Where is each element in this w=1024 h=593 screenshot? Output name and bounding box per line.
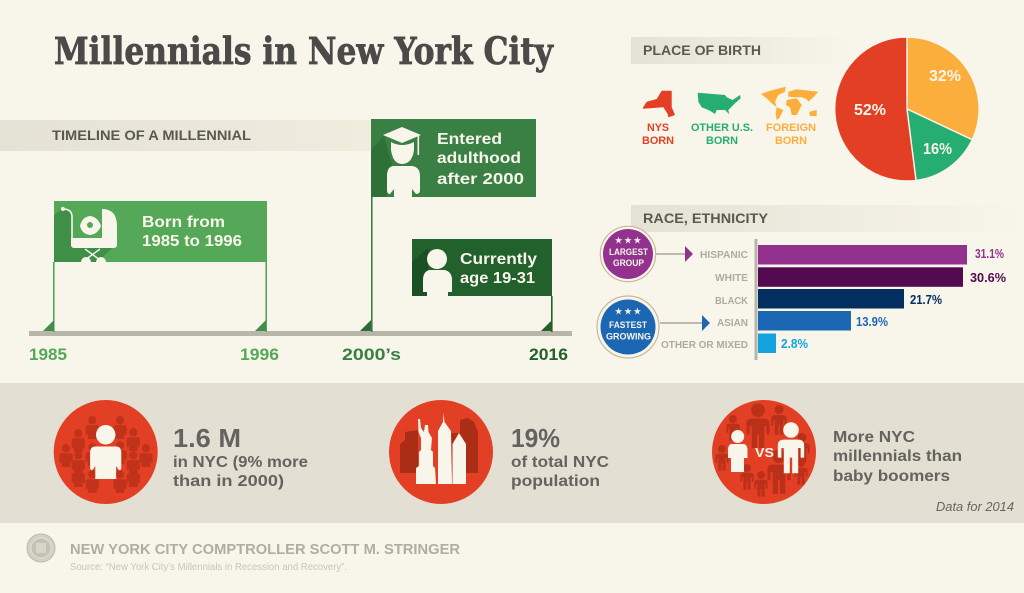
stat: 1.6 million: than in 2000) (173, 473, 284, 490)
timeline axis (29, 331, 572, 336)
icon: millennials vs boomers (712, 400, 816, 504)
panel: race, ethnicity (597, 205, 1024, 360)
icon: graduate (383, 127, 421, 197)
stat: more millennials than boomers: millennials than (833, 448, 962, 465)
pie chart: place of birth: 32% (929, 68, 961, 85)
heading band: race (631, 205, 1024, 232)
stat: 1.6 million (54, 400, 308, 504)
callout: largest group (600, 226, 693, 282)
legend: foreign born: FOREIGN (766, 122, 816, 134)
heading band: place of birth (631, 37, 856, 64)
legend: foreign born (766, 122, 816, 147)
icon: USA map (698, 93, 741, 114)
legend: NYS born (642, 122, 674, 147)
bar chart: ASIAN (717, 318, 748, 329)
heading band: timeline (0, 120, 372, 151)
callout: fastest growing: GROWING (606, 332, 651, 342)
heading band: race: RACE, ETHNICITY (643, 211, 768, 226)
panel: timeline of a millennial (0, 119, 572, 364)
pie chart: place of birth: 52% (854, 102, 886, 119)
text: 1.6 M: 1.6 M (173, 423, 241, 453)
callout: fastest growing: ★ ★ ★ (615, 307, 642, 316)
flag: entered adulthood after 2000 (360, 119, 536, 332)
bar chart: 21.7% (910, 293, 942, 307)
panel: place of birth (631, 37, 979, 181)
flag: entered adulthood after 2000: after 2000 (437, 171, 524, 188)
pie chart: place of birth (835, 37, 979, 181)
heading band: place of birth: PLACE OF BIRTH (643, 43, 761, 58)
bar chart: 13.9% (856, 315, 888, 329)
label: born from: Born from (142, 214, 225, 231)
stat: 19% (389, 400, 609, 504)
bar chart: OTHER OR MIXED (661, 340, 748, 351)
callout: fastest growing: FASTEST (609, 320, 647, 331)
title: Millennials in New York City (54, 29, 555, 73)
bar chart: HISPANIC (700, 250, 748, 261)
text: 19%: 19% (511, 423, 560, 453)
bar chart: 2.8% (781, 337, 808, 351)
icon: city seal (27, 534, 55, 562)
footer credit: NEW YORK CITY COMPTROLLER SCOTT M. STRINGER (70, 542, 461, 558)
icon: baby stroller (61, 207, 117, 262)
icon: New York State map (643, 91, 677, 117)
panel: key stats band (0, 383, 1024, 523)
callout: fastest growing (597, 296, 710, 358)
flag: currently age 19-31 (412, 239, 553, 332)
pie chart: place of birth: 16% (923, 141, 952, 158)
label: entered adulthood: Entered (437, 131, 502, 148)
stat: 19%: population (511, 473, 600, 490)
bar chart: 30.6% (970, 271, 1006, 285)
flag: currently age 19-31: age 19-31 (460, 270, 535, 287)
icon: person (423, 249, 452, 296)
label: currently age: Currently (460, 251, 537, 268)
flag: born from 1985 to 1996 (43, 201, 267, 332)
legend: NYS born: BORN (642, 135, 674, 147)
legend: foreign born: BORN (775, 135, 807, 147)
bar chart: 31.1% (975, 247, 1004, 261)
bar chart: WHITE (715, 273, 748, 284)
callout: largest group: ★ ★ ★ (615, 236, 642, 245)
bar chart (661, 239, 1006, 360)
flag: entered adulthood after 2000: adulthood (437, 150, 521, 167)
year labels: 1996 (240, 345, 279, 364)
legend: other U.S. born (691, 122, 753, 147)
bar chart: BLACK (715, 296, 749, 307)
icon: crowd with person (54, 400, 158, 504)
text: more NYC millennials: More NYC (833, 429, 915, 446)
legend: NYS born: NYS (647, 122, 669, 134)
footer source: Source: “New York City’s Millennials in Recession and Recovery”. (70, 562, 347, 573)
footer (27, 534, 461, 573)
icon: millennials vs boomers: VS (755, 445, 774, 460)
flag: born from 1985 to 1996: 1985 to 1996 (142, 233, 242, 250)
callout: largest group: LARGEST (609, 247, 648, 258)
stat: 19%: of total NYC (511, 454, 609, 471)
stat: more millennials than boomers (712, 400, 962, 504)
stat: more millennials than boomers: baby boomers (833, 468, 950, 485)
year labels (29, 345, 568, 364)
year labels: 1985 (29, 345, 67, 364)
heading band: timeline: TIMELINE OF A MILLENNIAL (52, 128, 251, 143)
legend: other U.S. born: BORN (706, 135, 738, 147)
note: data year: Data for 2014 (936, 499, 1014, 514)
callout: largest group: GROUP (613, 258, 645, 269)
icon: NYC skyline (389, 400, 493, 504)
icon: world map (761, 87, 818, 120)
year labels: 2016 (529, 345, 568, 364)
year labels: 2000’s (342, 345, 401, 364)
stat: 1.6 million: in NYC (9% more (173, 454, 308, 471)
legend: other U.S. born: OTHER U.S. (691, 122, 753, 134)
